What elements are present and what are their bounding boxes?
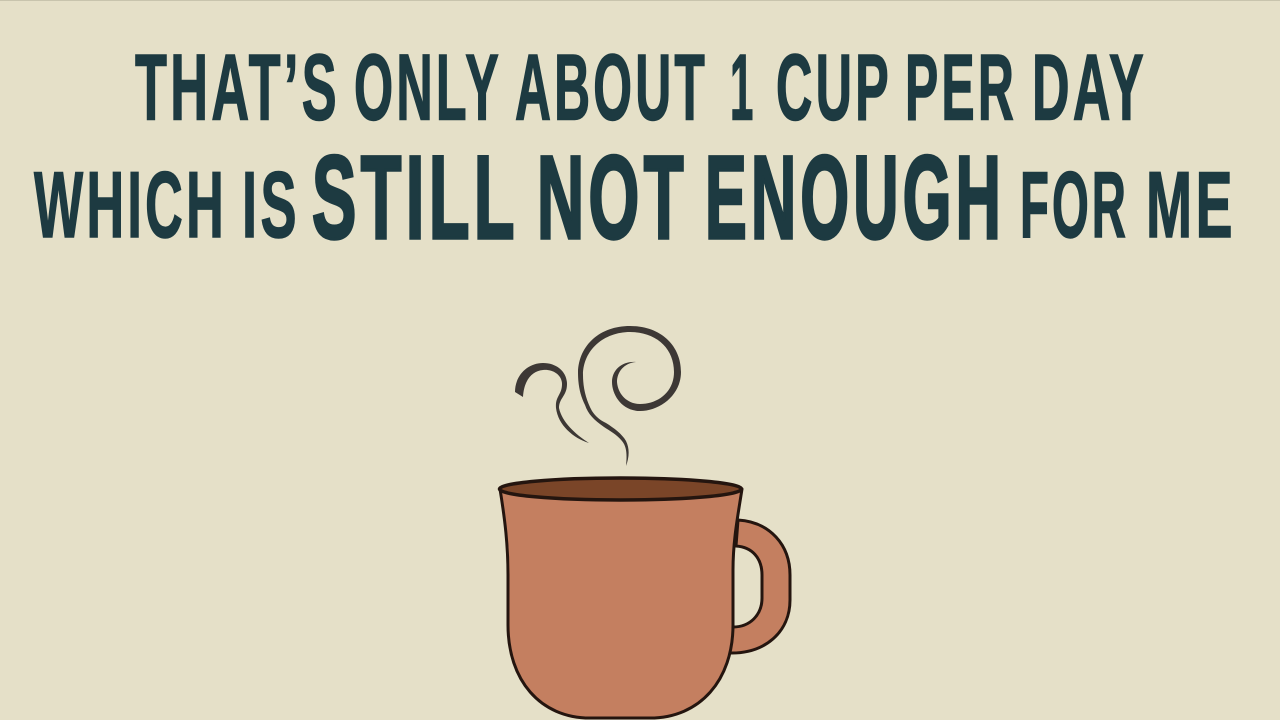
coffee surface	[500, 478, 742, 500]
emphasis: still not enough: STILL	[312, 132, 519, 264]
emphasis: still not enough: ENOUGH	[705, 132, 1005, 264]
heading line 1: ONLY	[354, 34, 502, 140]
heading line 1: PER	[905, 34, 1017, 140]
heading line 2	[34, 132, 1236, 264]
heading line 1: CUP	[776, 34, 892, 140]
heading line 2: FOR	[1020, 152, 1129, 257]
heading line 1	[135, 34, 1147, 140]
mug handle	[729, 520, 790, 653]
icon: steam swirls	[515, 326, 681, 466]
emphasis: still not enough	[312, 132, 1005, 264]
heading line 1: ABOUT	[515, 34, 708, 140]
heading line 1: DAY	[1032, 34, 1147, 140]
heading line 2: WHICH	[34, 152, 227, 257]
mug body	[500, 489, 742, 718]
heading line 1: 1	[730, 34, 756, 140]
icon: coffee mug	[500, 478, 790, 718]
heading line 1: THAT’S	[135, 34, 340, 140]
heading line 2: IS	[242, 152, 300, 257]
emphasis: still not enough: NOT	[537, 132, 688, 264]
